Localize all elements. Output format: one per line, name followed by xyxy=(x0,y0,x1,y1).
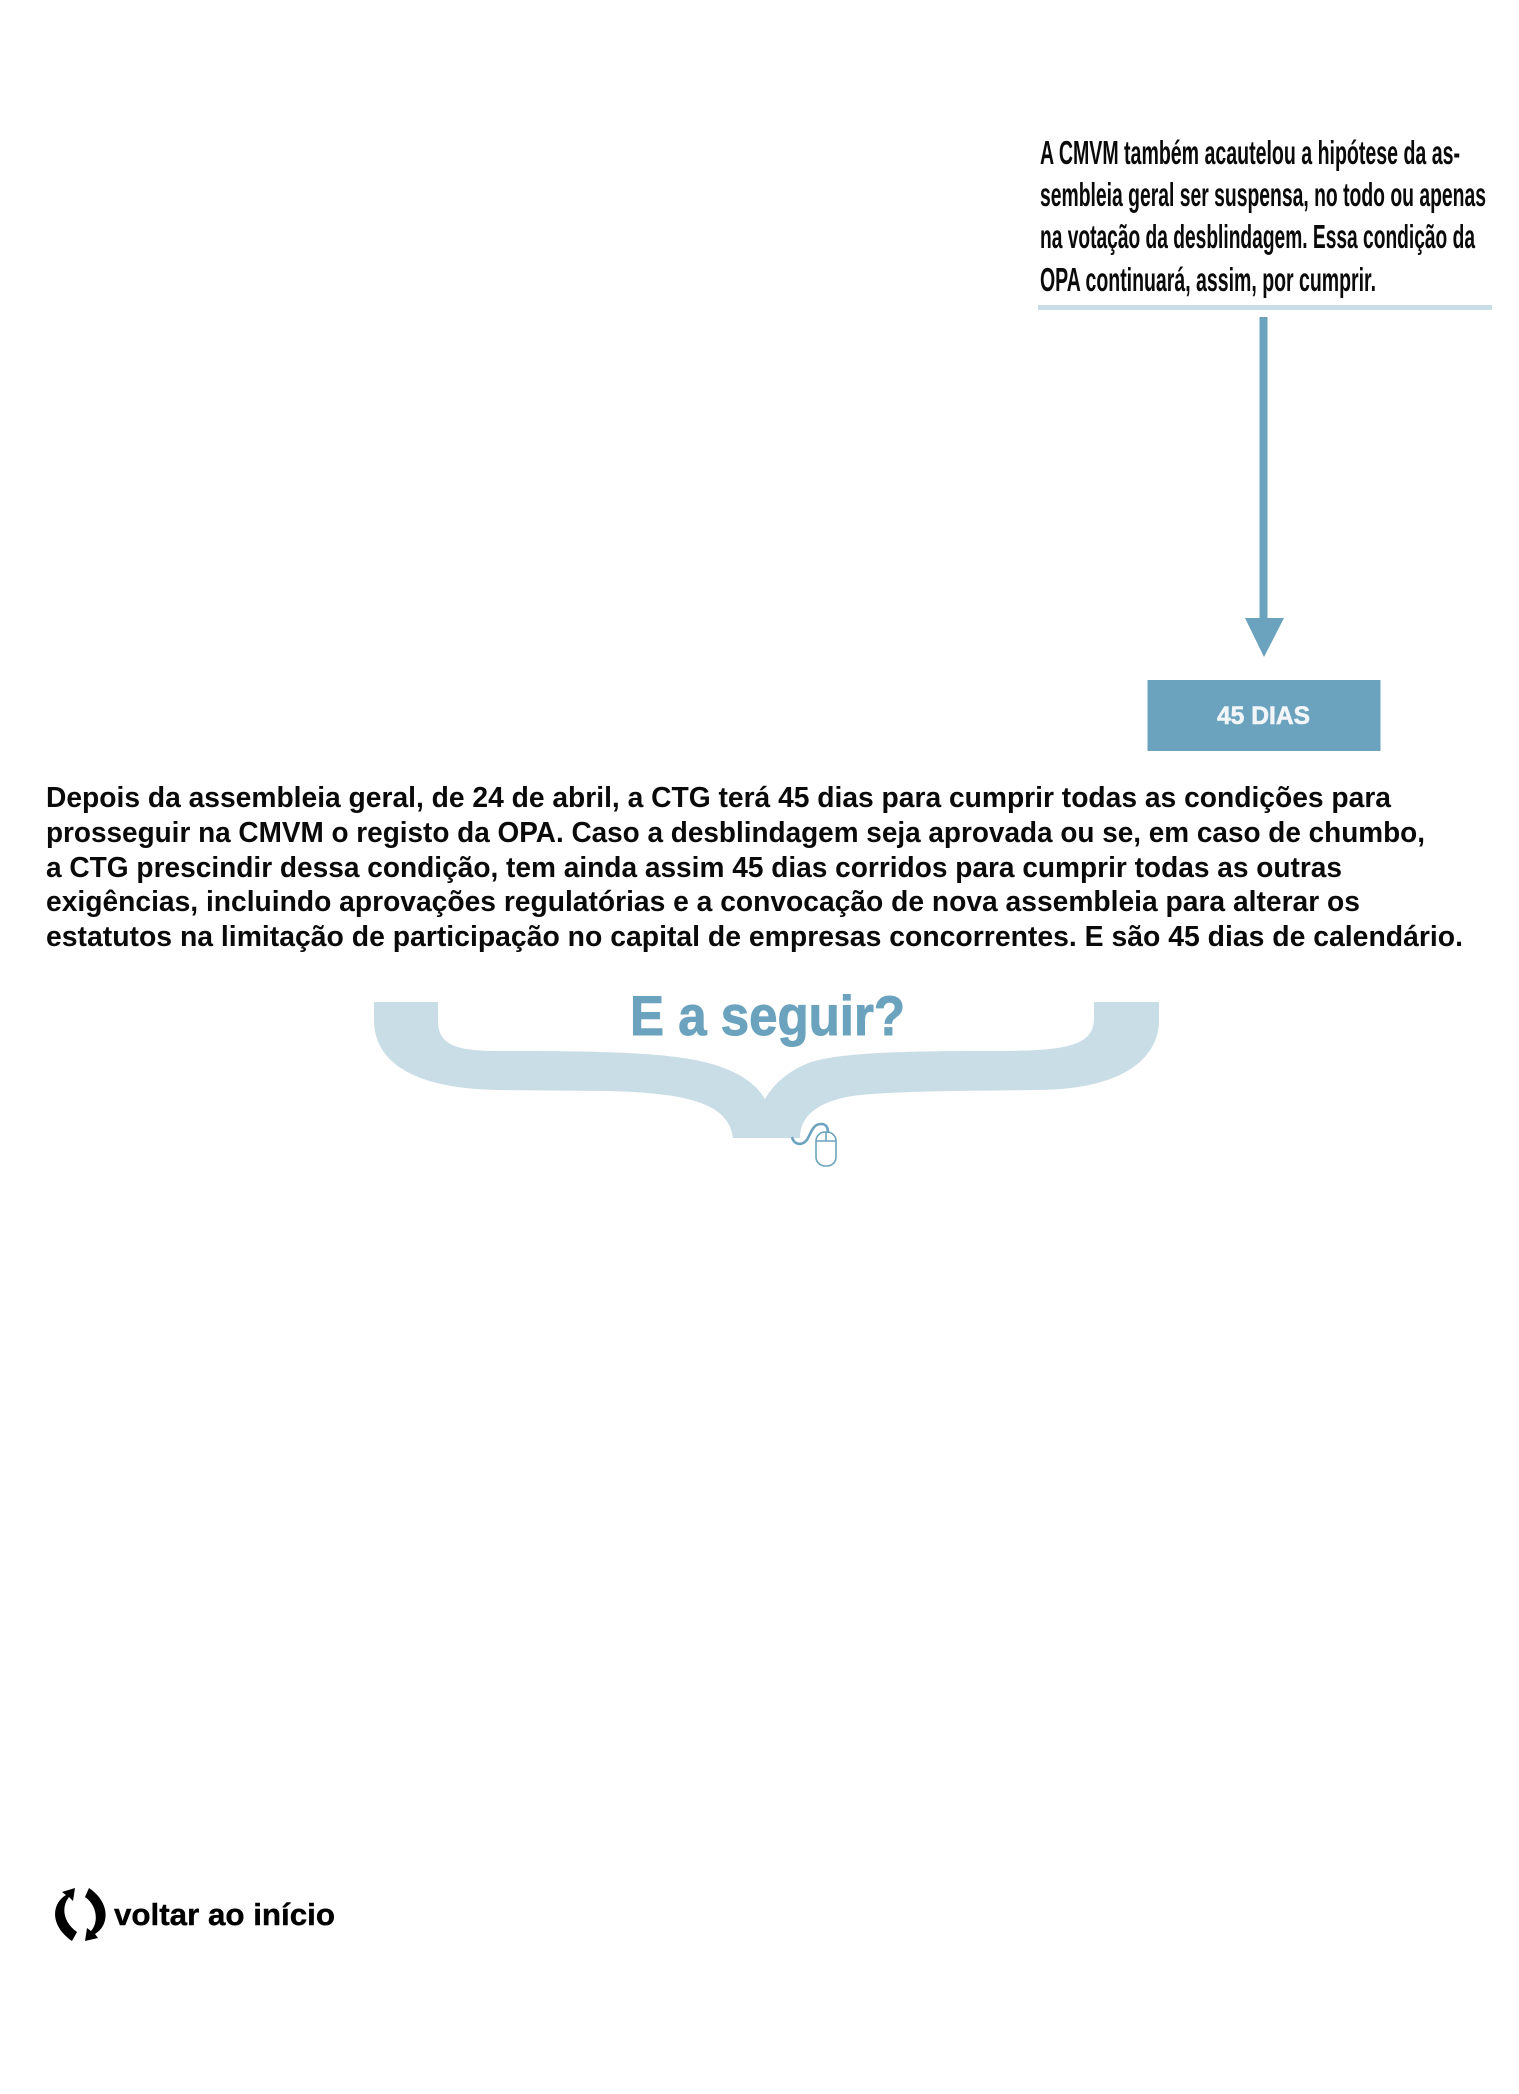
brace shape xyxy=(374,1002,1159,1138)
link: voltar ao início xyxy=(55,1888,335,1941)
rule under CMVM note xyxy=(1038,305,1492,310)
link text: voltar ao início xyxy=(114,1897,335,1932)
text block: explanation: prosseguir na CMVM o registo da OPA. Caso a desblindagem seja aprovada ou se, em caso de chumbo, xyxy=(46,817,1425,849)
text block: explanation: estatutos na limitação de participação no capital de empresas concorrentes. E são 45 dias de calendário. xyxy=(46,921,1463,953)
text block: explanation: a CTG prescindir dessa condição, tem ainda assim 45 dias corridos para cumprir todas as outras xyxy=(46,852,1342,884)
box: 45 dias xyxy=(1148,680,1380,751)
arrow: down to 45 dias xyxy=(1245,317,1284,657)
text block: explanation: Depois da assembleia geral, de 24 de abril, a CTG terá 45 dias para cumprir todas as condições para xyxy=(46,782,1392,814)
box: 45 dias: 45 DIAS xyxy=(1217,702,1310,730)
text block: CMVM note xyxy=(1040,134,1486,298)
text block: explanation xyxy=(46,782,1463,953)
text block: explanation: exigências, incluindo aprovações regulatórias e a convocação de nova assembleia para alterar os xyxy=(46,886,1360,918)
icon: mouse xyxy=(792,1124,836,1166)
title: E a seguir? xyxy=(630,984,905,1047)
icon: refresh arrows xyxy=(55,1888,106,1941)
